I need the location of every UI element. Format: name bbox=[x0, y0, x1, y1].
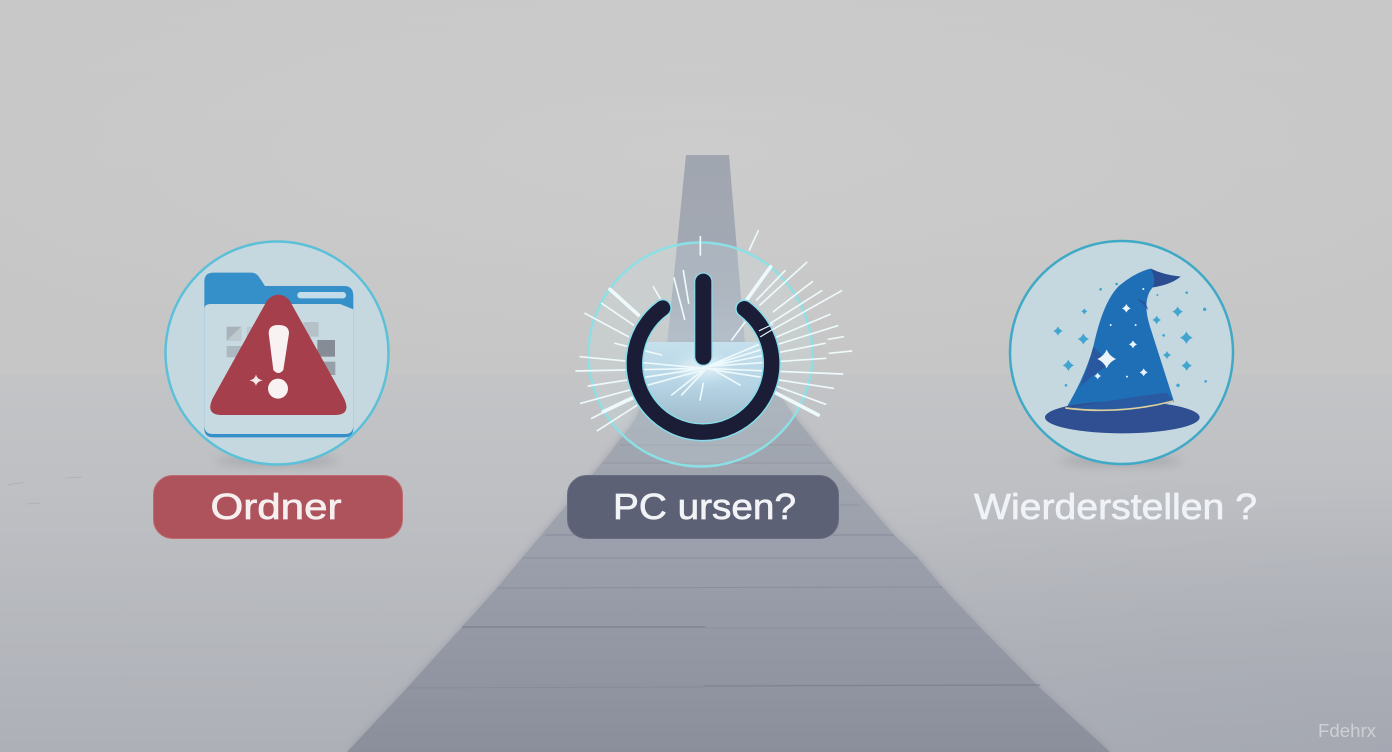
road: edge shadow bbox=[347, 345, 1110, 752]
power bar bbox=[676, 282, 731, 357]
panel: Ordner bbox=[154, 242, 402, 538]
label pill: Ordner bbox=[154, 476, 402, 538]
gold band line bbox=[1065, 401, 1173, 410]
icon: inner glowing disc bbox=[637, 342, 769, 422]
icon: circle shadow bbox=[215, 457, 339, 465]
exclamation mark bbox=[269, 325, 289, 373]
panel: Wierderstellen? bbox=[974, 241, 1257, 527]
hat cone bbox=[1066, 269, 1181, 408]
icon: folder warning bbox=[166, 242, 388, 464]
sparkle bbox=[249, 375, 263, 386]
label pill: PC ursen? bbox=[568, 476, 838, 538]
file thumbnails bbox=[227, 322, 335, 375]
watermark: Fdehrx bbox=[1318, 721, 1376, 741]
icon: power symbol bbox=[634, 282, 774, 432]
icon: light burst rays bbox=[576, 231, 852, 431]
panel: PC ursen? bbox=[568, 231, 852, 538]
stars around hat bbox=[1053, 283, 1207, 387]
road: receding walkway bbox=[347, 155, 1110, 752]
hat brim bbox=[1045, 401, 1200, 433]
road: near section with planks bbox=[347, 345, 1110, 752]
hat shadow folds bbox=[1080, 298, 1148, 387]
hat tip fold bbox=[1151, 269, 1181, 287]
icon: outer glass circle bbox=[588, 242, 812, 466]
icon: circle shadow bbox=[1059, 457, 1183, 465]
icon: wizard hat bbox=[1010, 241, 1233, 464]
road: distant tower section bbox=[667, 155, 745, 345]
power ring bbox=[634, 308, 772, 432]
warning triangle bbox=[210, 295, 346, 415]
folder front page bbox=[204, 304, 353, 434]
stars on hat bbox=[1094, 288, 1148, 379]
hat band bbox=[1066, 393, 1174, 411]
folder label slot bbox=[297, 292, 346, 298]
folder back and tab bbox=[204, 273, 353, 437]
label: Wierderstellen?: Wierderstellen ? bbox=[974, 486, 1257, 527]
label pill: PC ursen?: PC ursen? bbox=[613, 486, 796, 527]
label pill: Ordner: Ordner bbox=[210, 486, 342, 527]
rays crossing ring bbox=[759, 324, 774, 337]
